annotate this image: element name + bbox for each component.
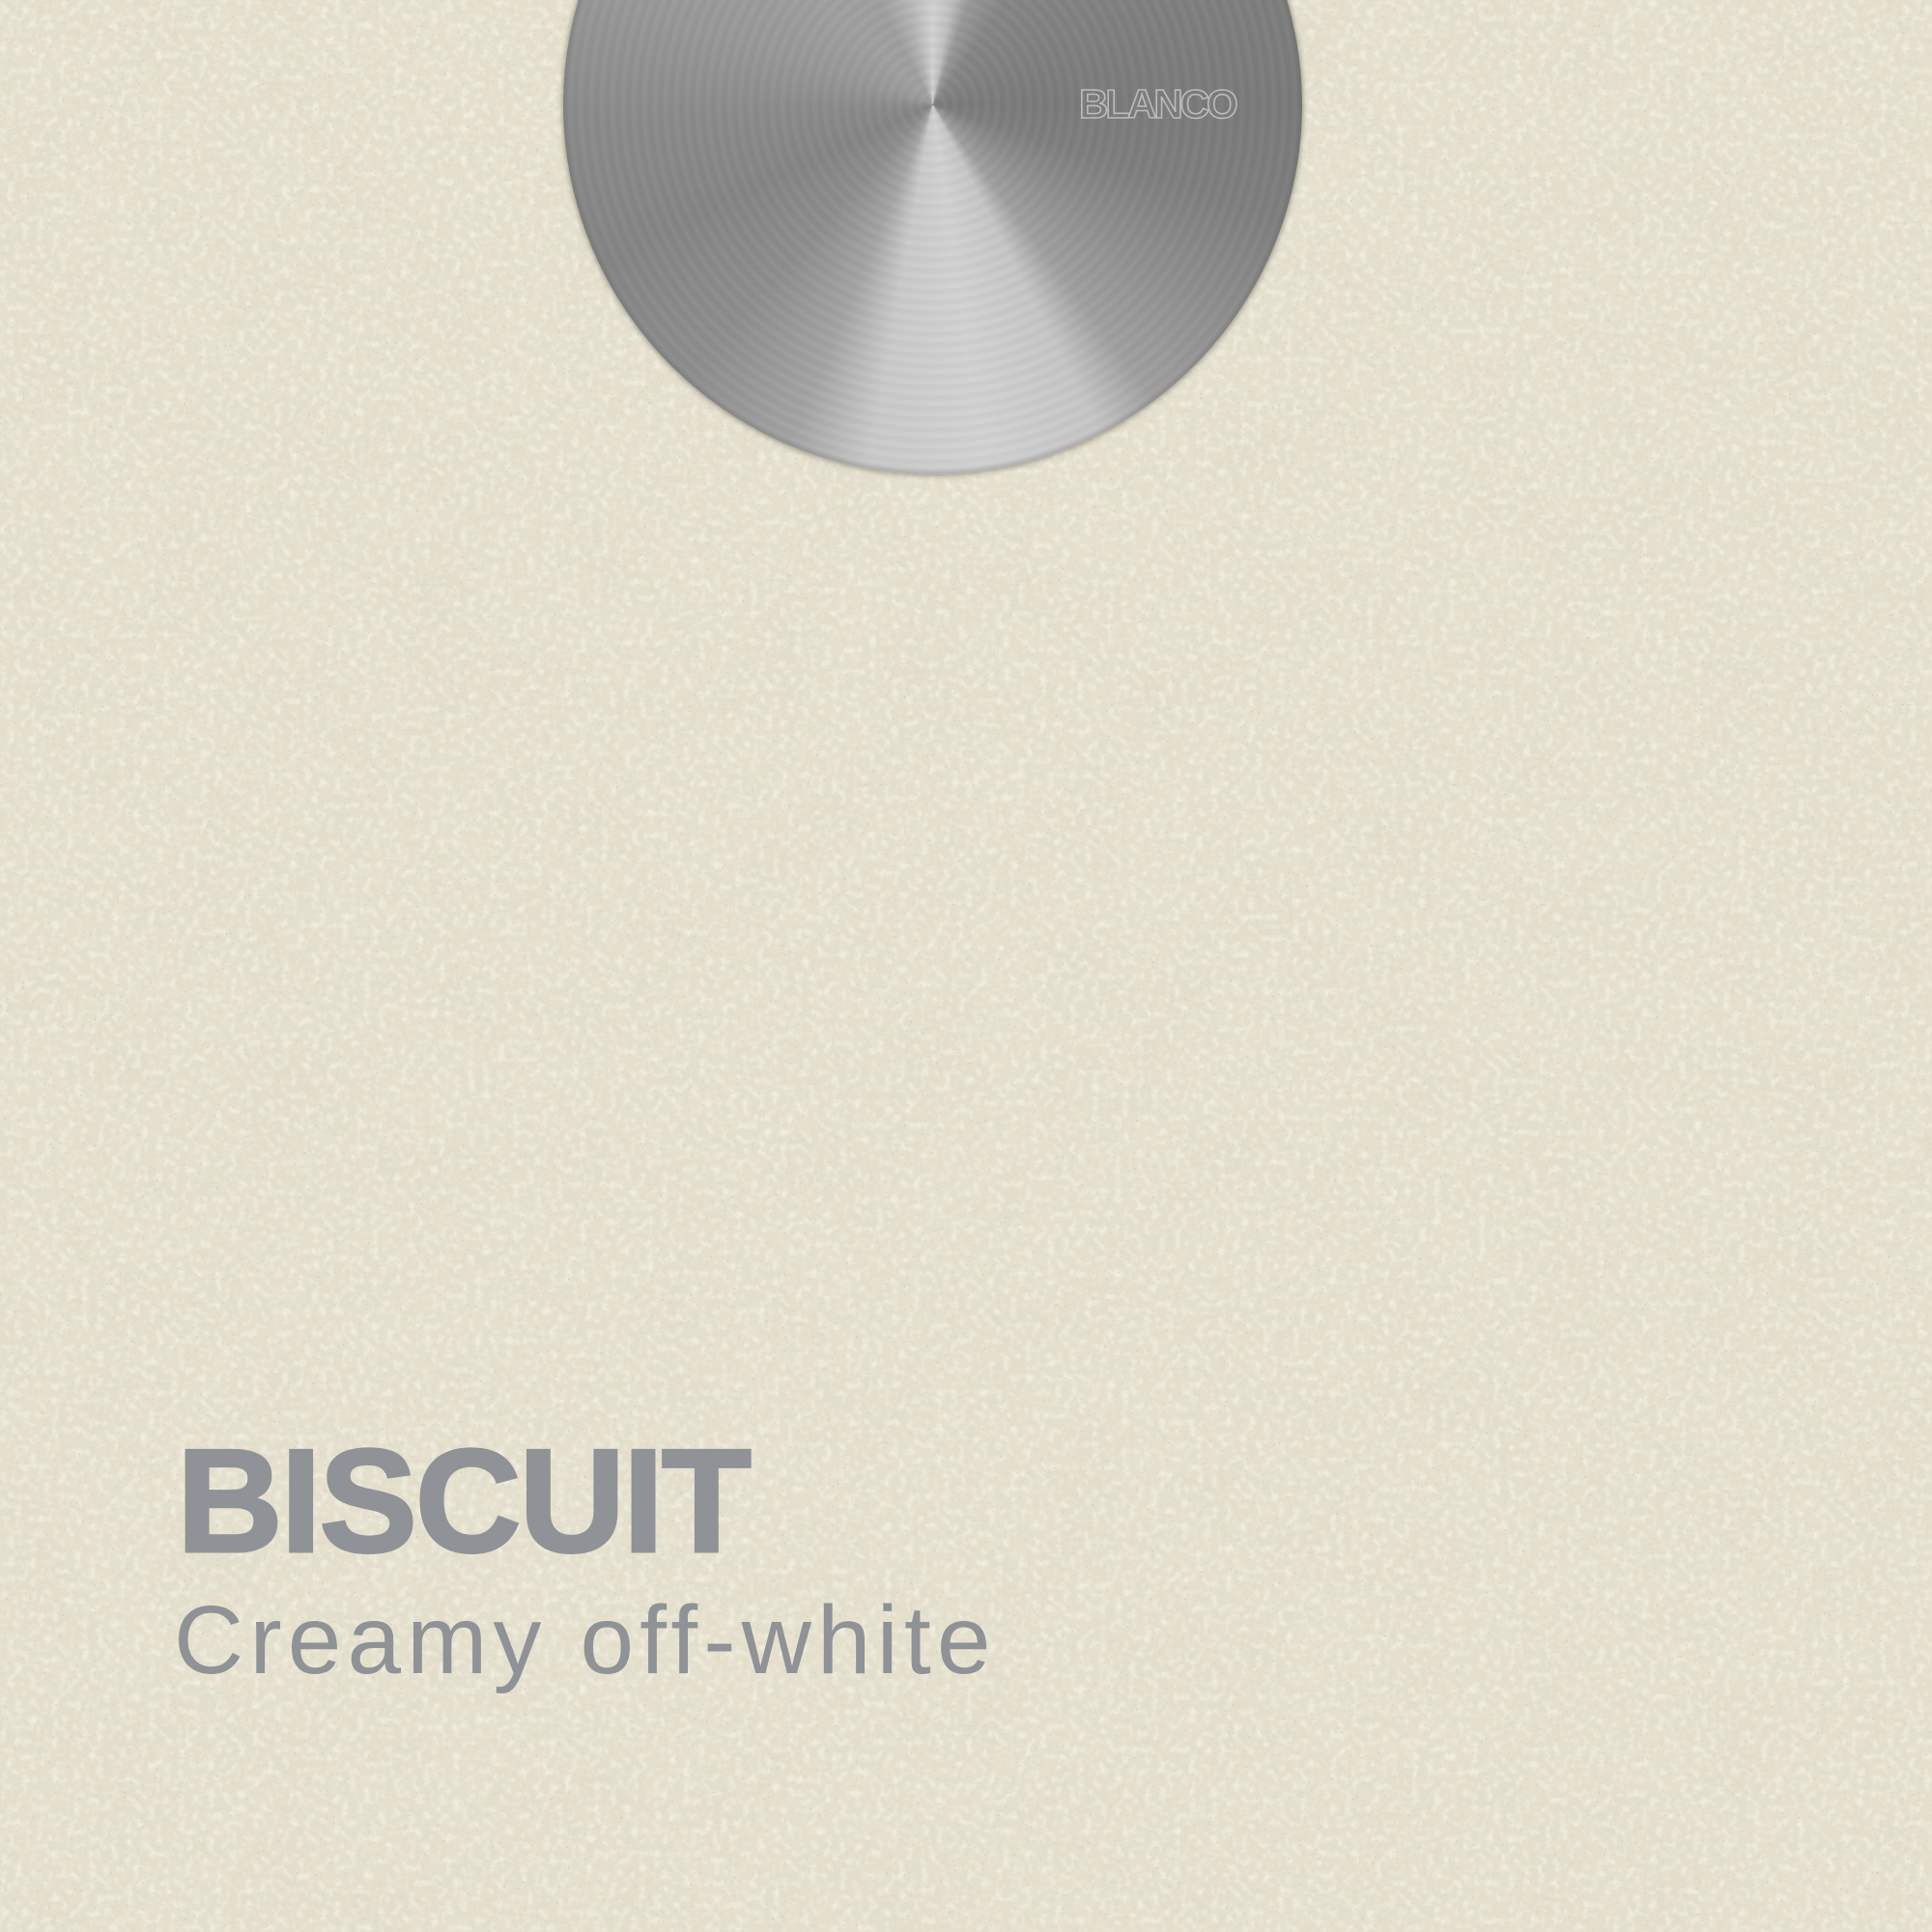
- embossed BLANCO logo: BLANCO: [1079, 81, 1236, 127]
- subtitle: Creamy off-white: Creamy off-white: [174, 1586, 997, 1694]
- brushed metal disc: [563, 0, 1302, 474]
- title: BISCUIT: BISCUIT: [177, 1419, 751, 1583]
